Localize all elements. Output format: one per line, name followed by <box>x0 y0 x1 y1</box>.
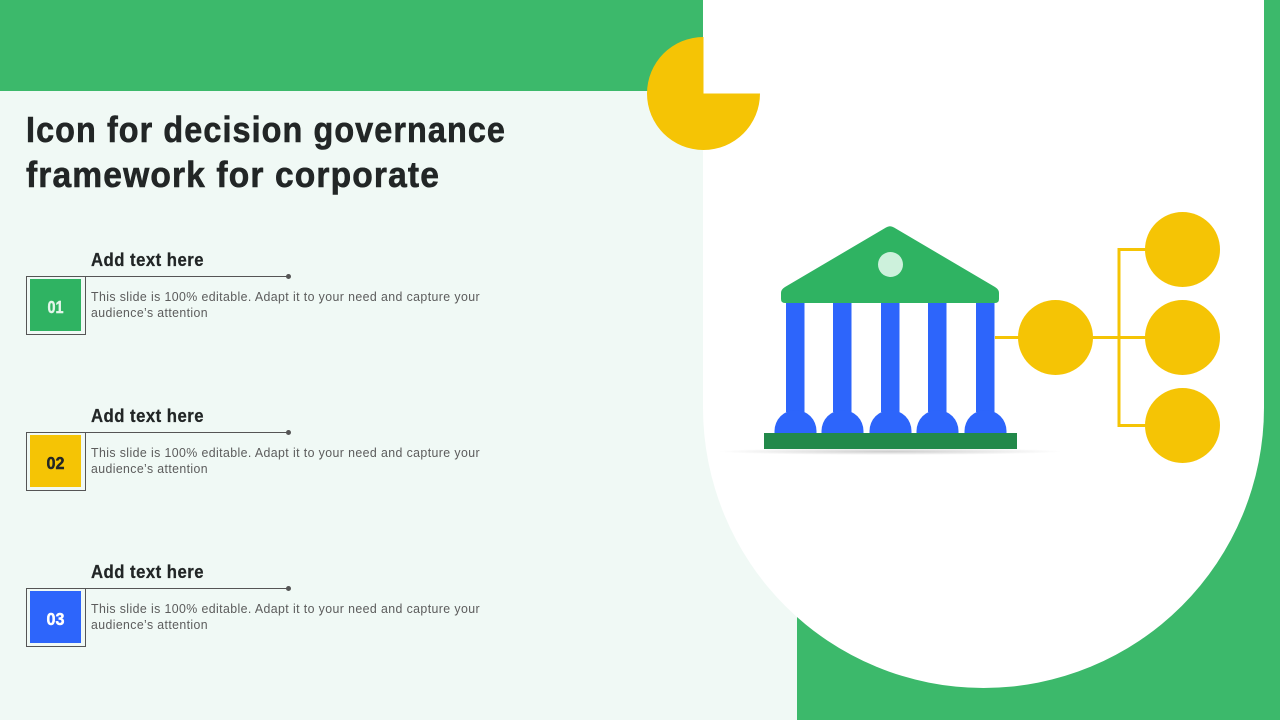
body text 01: This slide is 100% editable. Adapt it to your need and capture your <box>91 290 480 304</box>
connector line 02 <box>85 430 291 435</box>
body text 02: audience’s attention <box>91 462 208 476</box>
heading 02: Add text here <box>91 406 204 426</box>
connector line 03 <box>85 586 291 591</box>
heading 03: Add text here <box>91 562 204 582</box>
number badge 02 <box>26 432 86 490</box>
bottom right green block <box>797 0 1280 720</box>
icon: government building <box>718 226 1062 455</box>
pediment roof <box>781 226 999 303</box>
number badge 01: 01 <box>48 297 64 317</box>
body text 03: This slide is 100% editable. Adapt it to your need and capture your <box>91 602 480 616</box>
body text 01 <box>91 290 480 320</box>
yellow pie decoration <box>647 37 760 150</box>
ground shadow <box>718 448 1062 455</box>
item 03 <box>26 562 480 646</box>
base <box>764 433 1017 449</box>
number badge 01 <box>26 276 86 334</box>
top green band <box>0 0 704 91</box>
number badge 03: 03 <box>46 609 65 629</box>
org chart connectors <box>995 250 1146 426</box>
body text 01: audience’s attention <box>91 306 208 320</box>
body text 03: audience’s attention <box>91 618 208 632</box>
title <box>26 109 506 195</box>
item 02 <box>26 406 480 490</box>
columns <box>774 300 1006 434</box>
title: framework for corporate <box>26 154 440 195</box>
item 01 <box>26 250 480 334</box>
number badge 03 <box>26 588 86 646</box>
title: Icon for decision governance <box>26 109 506 150</box>
body text 02 <box>91 446 480 476</box>
connector line 01 <box>85 274 291 279</box>
roof medallion <box>878 252 903 277</box>
white rounded panel <box>703 0 1264 688</box>
org chart nodes <box>1018 212 1220 463</box>
body text 02: This slide is 100% editable. Adapt it to your need and capture your <box>91 446 480 460</box>
number badge 02: 02 <box>46 453 65 473</box>
body text 03 <box>91 602 480 632</box>
heading 01: Add text here <box>91 250 204 270</box>
